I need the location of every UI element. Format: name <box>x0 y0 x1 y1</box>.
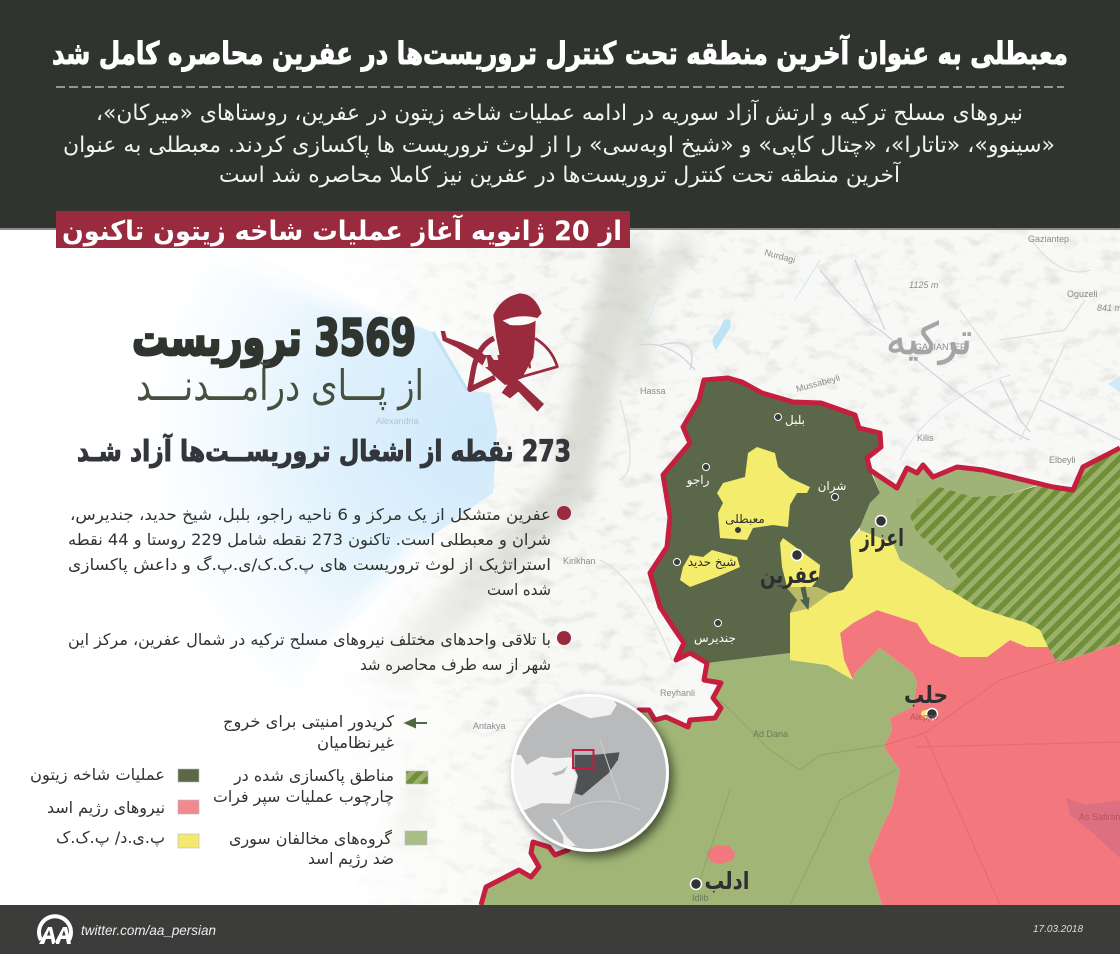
corridor arrow <box>801 587 809 609</box>
legend: corridor <box>223 712 427 753</box>
banner: از 20 ژانویه آغاز عملیات شاخه زیتون تاکنون <box>62 214 622 247</box>
legend: PYD: پ.ی.د/ پ.ک.ک <box>56 828 165 848</box>
locator map inset <box>500 690 680 860</box>
map regions <box>481 378 1120 905</box>
map place labels: Nurdagi <box>763 247 797 265</box>
map place labels: Alexandria <box>376 416 419 426</box>
region: cleared Euphrates Shield area <box>910 448 1120 663</box>
label: Turkey: ترکیه <box>886 314 972 365</box>
bullet text 1 <box>68 505 571 599</box>
legend: regime: نیروهای رژیم اسد <box>47 798 165 818</box>
map place labels: Reyhanli <box>660 688 695 698</box>
map town labels: راجو <box>686 473 710 488</box>
region: opposition near Azaz <box>860 467 1040 590</box>
map place labels <box>376 234 1120 731</box>
base map background <box>197 230 1120 905</box>
intro paragraph: نیروهای مسلح ترکیه و ارتش آزاد سوریه در ادامه عملیات شاخه زیتون در عفرین، روستاهای «میرکان»، <box>96 99 1023 126</box>
map town labels: ادلب <box>704 867 750 895</box>
map town labels: حلب <box>904 681 948 709</box>
region: Olive Branch <box>650 378 881 663</box>
map place labels: GAZIANTEP <box>915 342 966 352</box>
bullet text 2: شهر از سه طرف محاصره شد <box>360 655 551 675</box>
region: opposition groups west of Aleppo <box>481 648 917 905</box>
map town labels: Ad Dana <box>753 729 788 739</box>
region: Afrin pocket <box>780 538 820 587</box>
map town labels: شران <box>818 479 846 494</box>
map place labels: Kilis <box>917 433 934 443</box>
legend: cleared zones: مناطق پاکسازی شده در <box>233 766 394 786</box>
map place labels: Oguzeli <box>1067 289 1098 299</box>
legend: olive branch: عملیات شاخه زیتون <box>30 765 165 785</box>
roads <box>700 700 895 905</box>
date: 17.03.2018 <box>1033 924 1083 935</box>
subheadline: از پـــای درآمـــدنـــد <box>136 360 424 411</box>
intro paragraph: آخرین منطقه تحت کنترل تروریست‌ها در عفرین نیز کاملا محاصره شد است <box>219 161 901 188</box>
footer <box>0 905 1120 954</box>
intro paragraph <box>63 99 1055 188</box>
map place labels: Hassa <box>640 386 666 396</box>
map town labels: اعزاز <box>859 524 904 552</box>
map town labels: بلبل <box>785 413 805 427</box>
map town labels: Aleppo <box>910 712 938 722</box>
header panel <box>0 0 1120 230</box>
bullet text 1: استراتژیک از لوث تروریست های پ.ک.ک/ی.پ.گ و داعش پاکسازی <box>68 555 551 575</box>
map town labels: معبطلی <box>725 512 765 526</box>
legend: cleared zones <box>213 766 428 807</box>
civilian corridor <box>786 587 830 613</box>
map town labels: عفرین <box>760 561 820 589</box>
bullet text 1: عفرین متشکل از یک مرکز و 6 ناحیه راجو، بلبل، شیخ حدید، جندیرس، <box>70 505 551 525</box>
region: Idlib regime pocket <box>706 845 735 864</box>
map place labels: Mussabeyli <box>795 373 841 394</box>
region: regime forces <box>840 610 1120 905</box>
headline: terrorists count: 3569 تروریست <box>132 309 416 368</box>
map place labels: Antakya <box>473 721 506 731</box>
legend: corridor: کریدور امنیتی برای خروج <box>223 712 394 732</box>
legend <box>30 712 428 869</box>
map place labels: Elbeyli <box>1049 455 1076 465</box>
region: YPG yellow corridor <box>790 530 1048 680</box>
map place labels: Gaziantep <box>1028 234 1069 244</box>
icon: terrorist with rifle <box>441 293 557 412</box>
legend: opposition <box>229 829 427 869</box>
map town labels: Idlib <box>692 893 709 903</box>
legend: corridor: غیرنظامیان <box>317 733 394 753</box>
region: Mabatli pocket <box>717 447 810 540</box>
intro paragraph: «سینوو»، «تاتارا»، «چتال کاپی» و «شیخ اوبه‌سی» را از لوث تروریست ها پاکسازی کردند. معبطلی به عنوان <box>63 133 1055 158</box>
map town labels: جندیرس <box>694 631 736 646</box>
icon: AA logo <box>39 916 71 944</box>
map place labels: 1125 m <box>909 280 939 290</box>
bullet text 1: شران و معبطلی است. تاکنون 273 نقطه شامل 229 روستا و 44 نقطه <box>68 530 551 550</box>
map town labels <box>674 413 1120 903</box>
headline: liberated points: 273 نقطه از اشغال تروریســت‌ها آزاد شـد <box>77 433 571 468</box>
twitter handle: twitter.com/aa_persian <box>81 922 216 938</box>
legend: opposition: ضد رژیم اسد <box>308 849 394 869</box>
legend: cleared zones: چارچوب عملیات سپر فرات <box>213 787 394 807</box>
region: As Safirah shade <box>1066 798 1120 858</box>
bullet text 1: شده است <box>487 580 551 599</box>
bullet text 2: با تلاقی واحدهای مختلف نیروهای مسلح ترکیه در شمال عفرین، مرکز این <box>68 630 551 650</box>
Turkey-Syria border <box>481 378 1120 905</box>
bullet text 2 <box>68 630 571 675</box>
legend: opposition: گروه‌های مخالفان سوری <box>229 829 392 849</box>
region: Sheikh Hadid pocket <box>680 550 740 587</box>
map place labels: Kirikhan <box>563 556 596 566</box>
map town labels: As Safirah <box>1079 812 1120 822</box>
map town labels: شیخ حدید <box>688 555 736 569</box>
